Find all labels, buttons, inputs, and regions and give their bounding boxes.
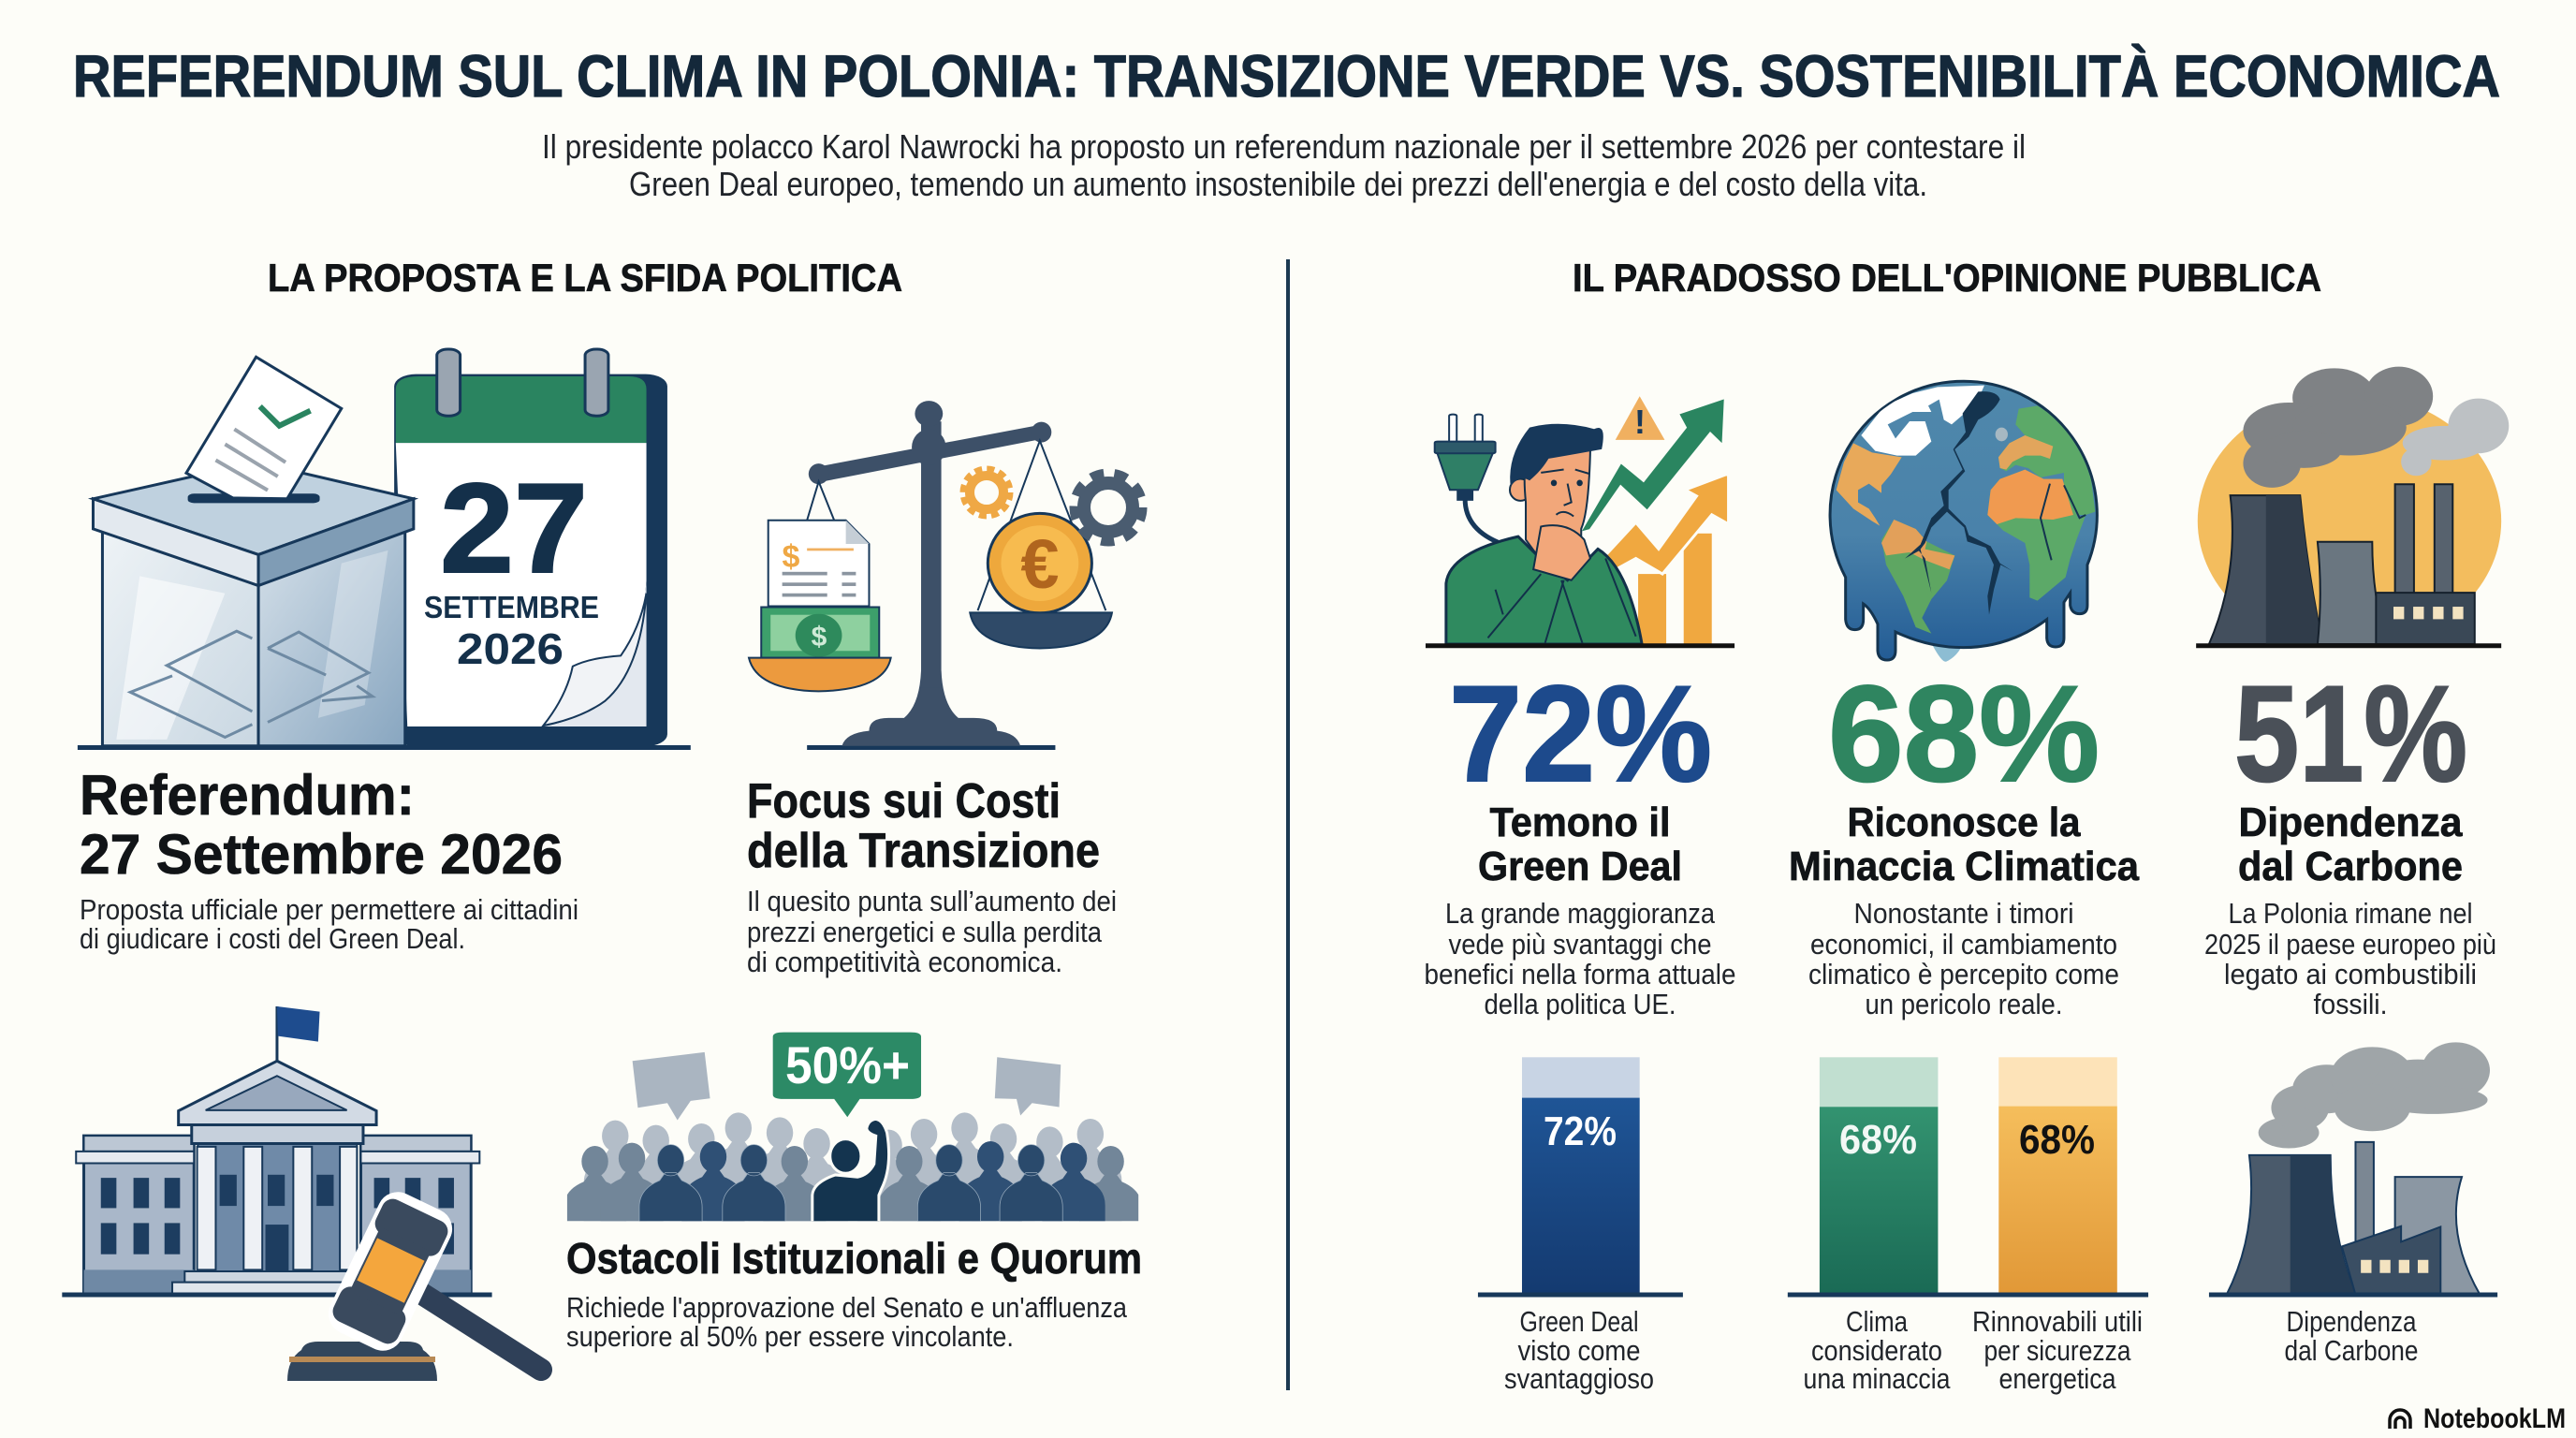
stat: 68%: 68% [1828,657,2100,810]
text block: ostacoli istituzionali: Richiede l'approvazione del Senato e un'affluenza [566,1291,1128,1324]
icon: calendar [394,349,667,746]
stat: 51%: Dipendenza [2239,800,2463,845]
subtitle text: Il presidente polacco Karol Nawrocki ha proposto un referendum nazionale per il settembre 2026 per contestare il [542,127,2026,166]
text block: focus sui costi: Focus sui Costi [747,774,1061,829]
text block: focus sui costi [747,774,1117,978]
stat: 72%: benefici nella forma attuale [1425,958,1735,990]
icon: orange gear [963,469,1010,516]
bar chart: green deal [1478,1057,1683,1395]
icon: crowd with 50%+ bubble [564,1033,1142,1261]
section heading: right: IL PARADOSSO DELL'OPINIONE PUBBLICA [1573,256,2321,300]
stat: 68%: un pericolo reale. [1865,988,2063,1020]
stat: 51%: 51% [2234,657,2467,810]
stat: 51%: fossili. [2314,988,2387,1020]
stat: 68%: Minaccia Climatica [1789,844,2139,889]
stat: 72%: Temono il [1490,800,1670,845]
bar chart: clima e rinnovabili [1788,1057,2148,1395]
text block: focus sui costi: di competitività economica. [747,946,1062,978]
text block: focus sui costi: prezzi energetici e sulla perdita [747,916,1103,948]
bar chart: clima e rinnovabili: Clima [1846,1305,1909,1338]
text block: ostacoli istituzionali: Ostacoli Istituzionali e Quorum [566,1234,1142,1283]
text block: referendum [80,764,578,955]
text block: focus sui costi: della Transizione [747,824,1100,878]
icon: power plant with sun and smoke [2196,367,2509,649]
icon: senate building [62,1006,492,1295]
stat: 51%: La Polonia rimane nel [2228,897,2473,930]
icon: worried man with plug and rising arrows: ! [1634,403,1646,441]
stat: 72%: della politica UE. [1485,988,1676,1020]
icon: voting paper [186,357,342,499]
icon: coal plant with label [2209,1042,2497,1367]
text block: referendum: Proposta ufficiale per permettere ai cittadini [80,893,578,926]
bar chart: green deal: Green Deal [1520,1305,1638,1338]
bar chart: green deal: visto come [1518,1334,1640,1367]
text block: referendum: di giudicare i costi del Green Deal. [80,922,465,955]
text block: focus sui costi: Il quesito punta sull’aumento dei [747,885,1117,917]
icon: crowd with 50%+ bubble: 50%+ [785,1035,910,1094]
stat: 51%: dal Carbone [2238,844,2463,889]
section heading: left: LA PROPOSTA E LA SFIDA POLITICA [268,256,902,300]
panel: il paradosso dell'opinione pubblica [1425,256,2509,1395]
bar chart: green deal: svantaggioso [1504,1362,1654,1395]
stat: 51% [2204,657,2496,1020]
stat: 72%: 72% [1449,657,1712,810]
stat: 68%: economici, il cambiamento [1810,928,2117,961]
text block: ostacoli istituzionali [566,1234,1142,1353]
bar chart: clima e rinnovabili: per sicurezza [1984,1334,2131,1367]
icon: worried man with plug and rising arrows [1426,396,1734,646]
icon: calendar: 2026 [457,624,564,673]
icon: balance scale: $ [812,622,827,653]
stat: 72%: Green Deal [1478,844,1682,889]
stat: 68%: Riconosce la [1848,800,2081,845]
stat: 51%: 2025 il paese europeo più [2204,928,2496,961]
icon: gavel [287,1192,541,1381]
panel: la proposta e la sfida politica [62,256,1142,1381]
bar chart: clima e rinnovabili: energetica [1999,1362,2116,1395]
icon: balance scale: $ [783,539,800,575]
stat: 72% [1425,657,1735,1020]
bar chart: clima e rinnovabili: 68% [2019,1117,2095,1163]
bar chart: green deal: 72% [1544,1108,1617,1154]
bar chart: clima e rinnovabili: considerato [1811,1334,1942,1367]
text block: ostacoli istituzionali: superiore al 50% per essere vincolante. [566,1320,1014,1353]
stat: 72%: vede più svantaggi che [1449,928,1711,961]
bar chart: clima e rinnovabili: Rinnovabili utili [1972,1305,2143,1338]
icon: gray gear [1075,474,1142,541]
icon: cracked melting globe [1830,381,2097,662]
stat: 68% [1789,657,2139,1020]
bar chart: clima e rinnovabili: 68% [1839,1117,1917,1163]
stat: 51%: legato ai combustibili [2224,958,2477,990]
stat: 68%: Nonostante i timori [1853,897,2074,930]
subtitle text [542,127,2026,203]
stat: 72%: La grande maggioranza [1445,897,1716,930]
icon: coal plant with label: Dipendenza [2286,1305,2417,1338]
text block: referendum: Referendum: [80,764,415,827]
icon: balance scale: € [1020,525,1060,603]
bar chart: clima e rinnovabili: una minaccia [1803,1362,1951,1395]
stat: 68%: climatico è percepito come [1808,958,2119,990]
icon: coal plant with label: dal Carbone [2284,1334,2419,1367]
subtitle text: Green Deal europeo, temendo un aumento insostenibile dei prezzi dell'energia e del costo della vita. [629,165,1927,203]
icon: balance scale [749,401,1142,748]
icon: ballot box [78,357,691,748]
icon: calendar: SETTEMBRE [424,590,599,624]
icon: calendar: 27 [440,457,588,599]
text block: referendum: 27 Settembre 2026 [80,823,563,886]
